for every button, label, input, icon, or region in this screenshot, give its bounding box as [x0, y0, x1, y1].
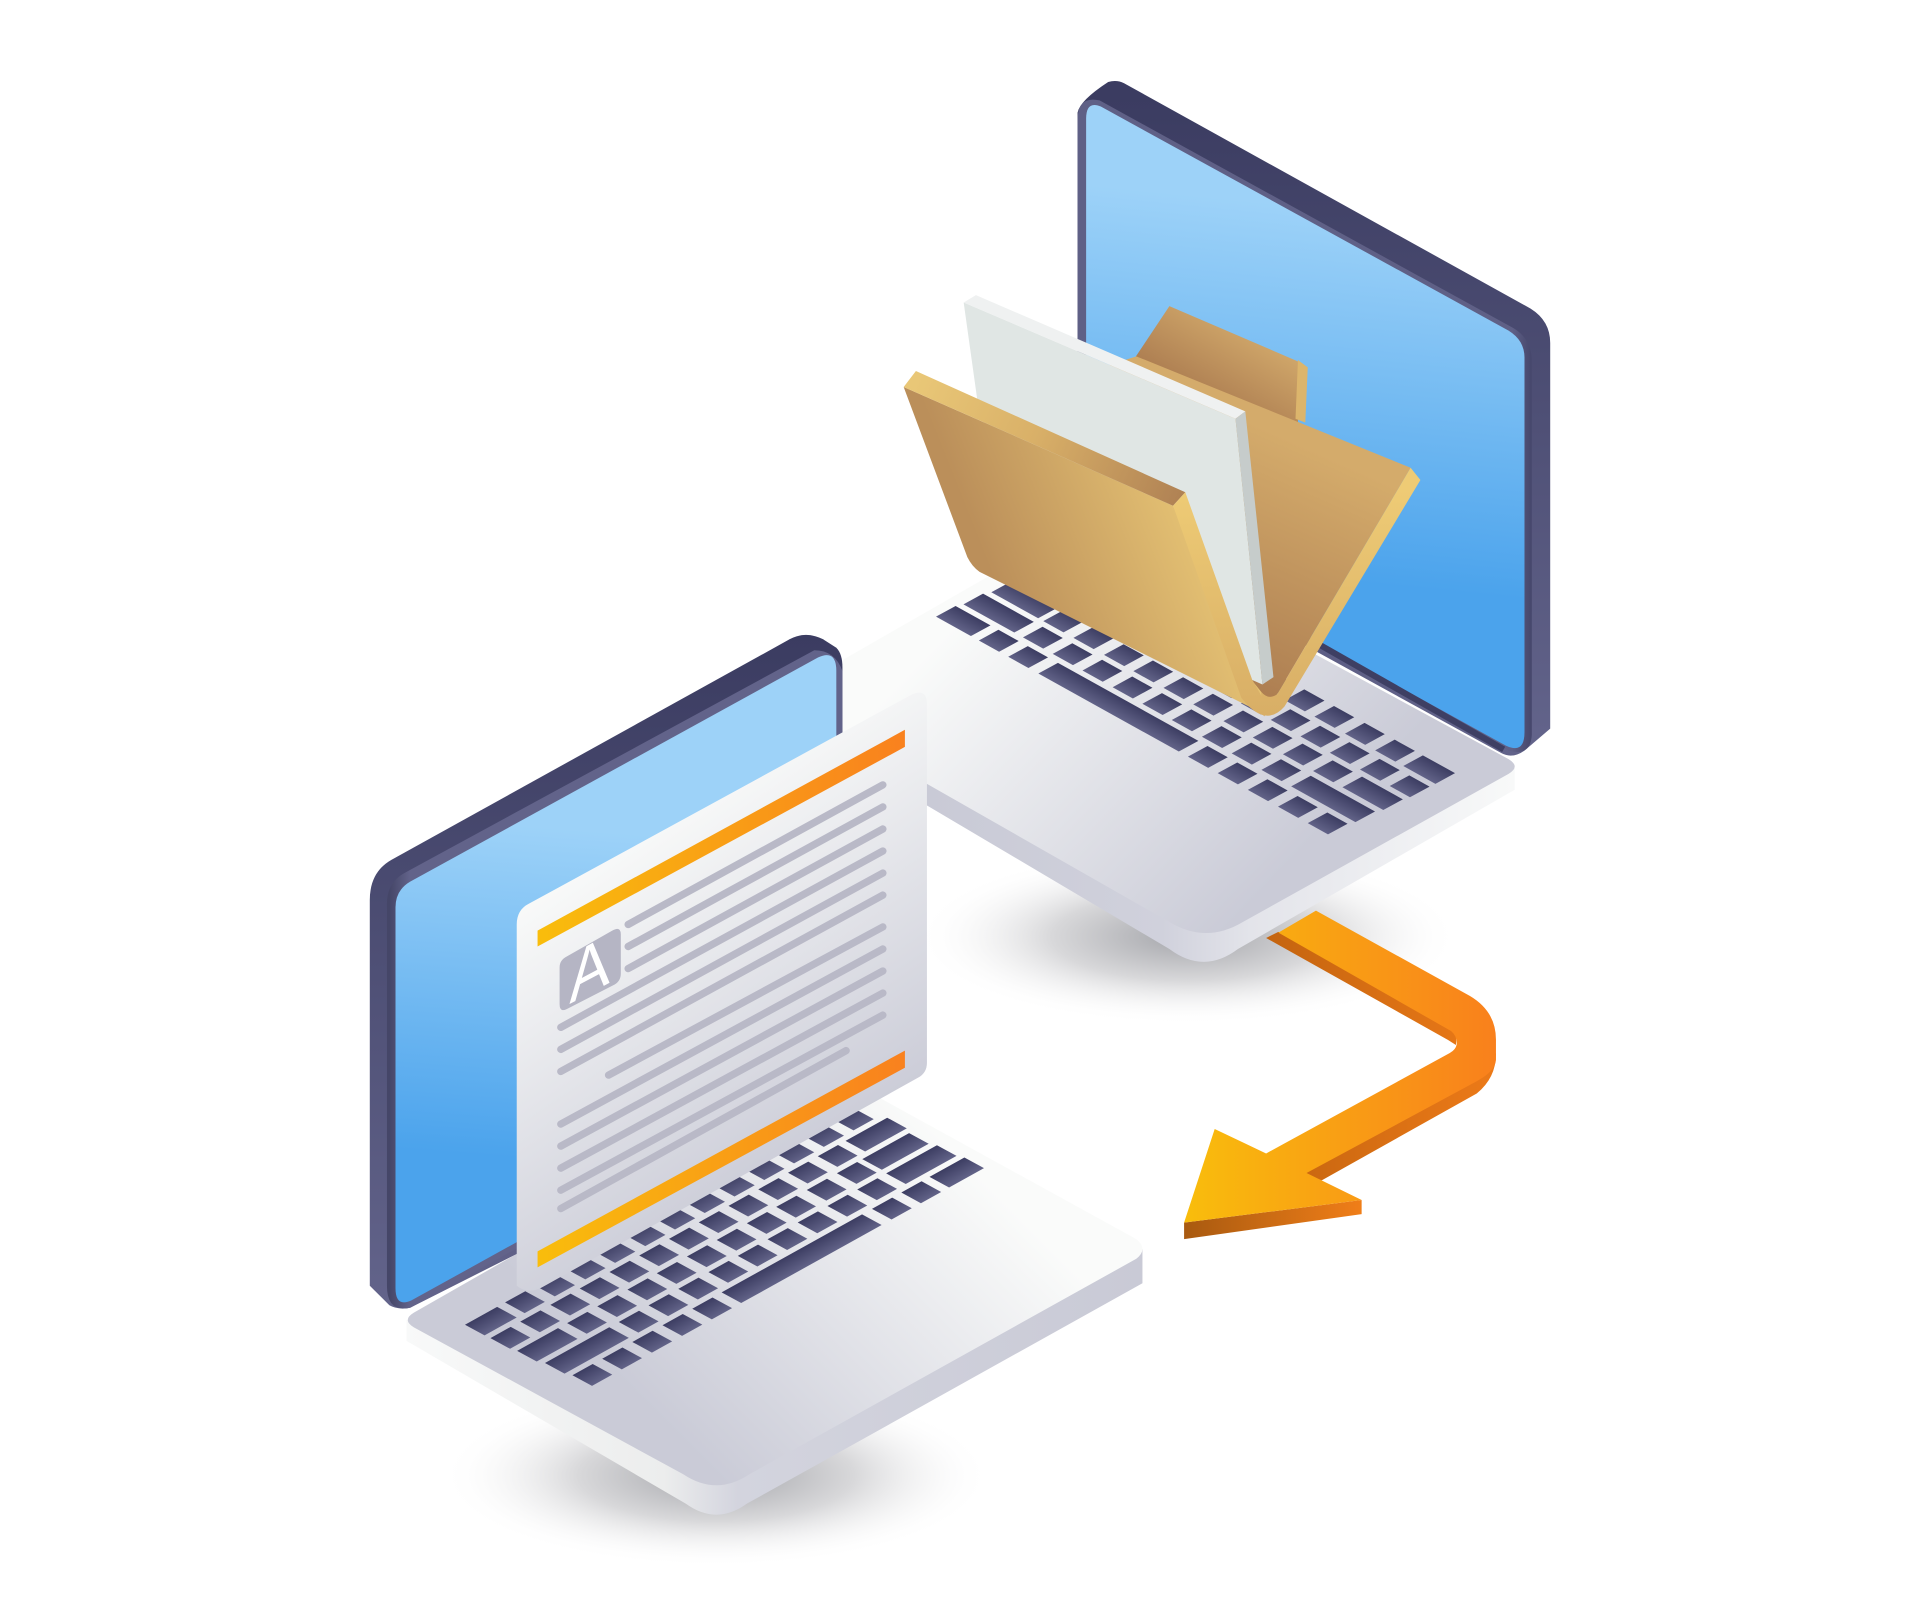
icon: letter A tile: A — [569, 918, 610, 1019]
folder front panel — [904, 371, 1265, 716]
folder back panel — [1102, 356, 1411, 700]
document page — [517, 693, 927, 1291]
upper laptop — [776, 81, 1550, 962]
keyboard: upper — [936, 551, 1455, 838]
arrow: transfer from upper to lower laptop — [1184, 911, 1496, 1239]
page sheet — [517, 693, 927, 1291]
folder back rim — [1249, 468, 1420, 716]
keyboard: lower — [465, 1103, 984, 1390]
laptop base: lower — [407, 1073, 1142, 1515]
top orange bar — [538, 730, 905, 947]
shadow: lower laptop — [441, 1384, 992, 1567]
screen: upper laptop — [1078, 81, 1550, 756]
folder tab — [1133, 306, 1308, 422]
shadow: upper laptop — [916, 849, 1460, 1025]
text lines: second paragraph — [561, 927, 883, 1209]
bottom orange bar — [538, 1051, 905, 1267]
paper sheet — [964, 295, 1273, 684]
folder with paper — [904, 295, 1420, 716]
laptop base: upper — [776, 525, 1515, 962]
icon: letter A tile — [560, 918, 621, 1019]
screen: lower laptop — [370, 635, 842, 1309]
lower laptop — [370, 635, 1142, 1515]
text lines: first paragraph — [561, 785, 883, 1071]
